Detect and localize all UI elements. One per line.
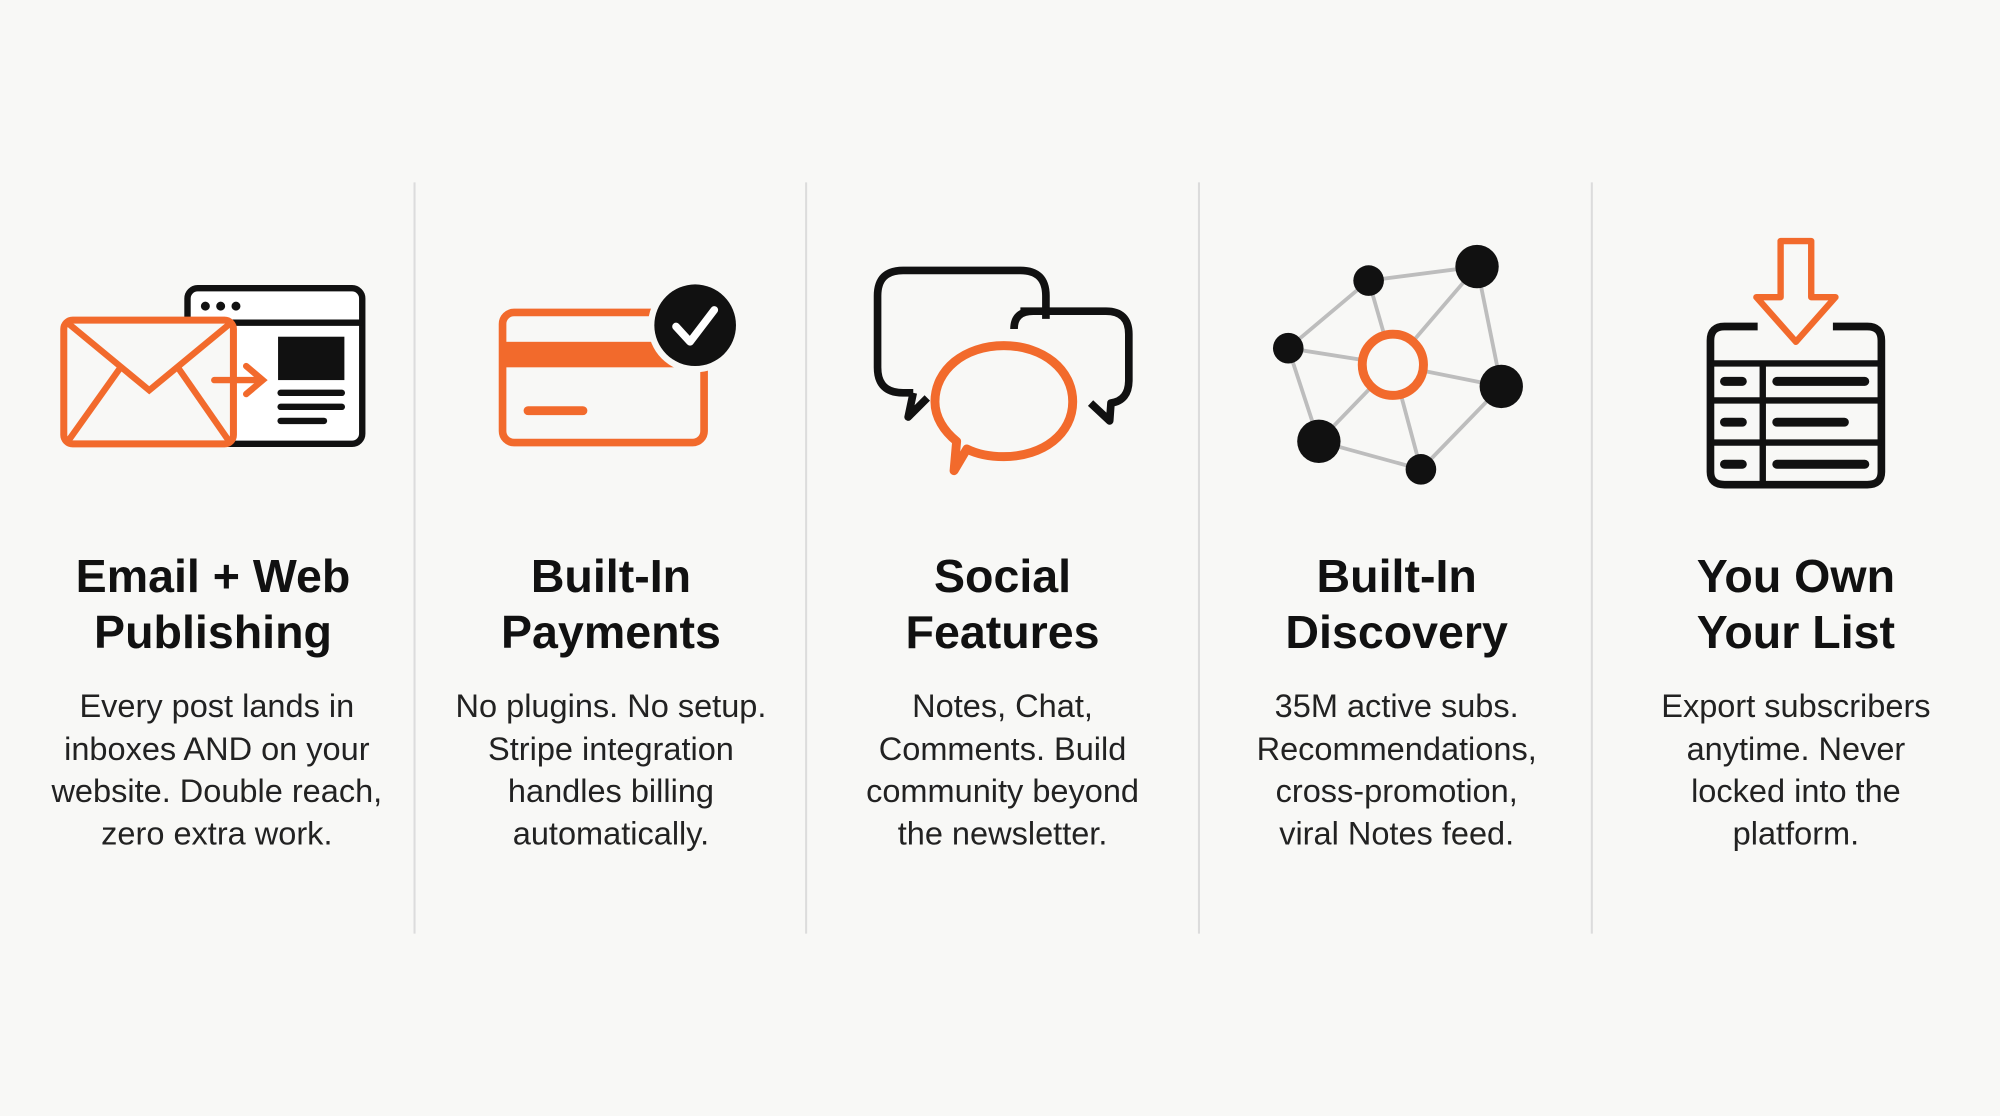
title: Discovery [1285,606,1508,658]
icon: table with download arrow [1710,241,1881,485]
panel: you own your list [1661,241,1931,851]
text block: Notes, Chat, [912,688,1093,724]
icon: card with check [503,278,742,443]
icon: network [1273,245,1523,485]
text block: No plugins. No setup. [456,688,766,724]
text block: the newsletter. [898,815,1107,851]
text block: Stripe integration [488,731,734,767]
text block: locked into the [1691,773,1901,809]
text block: Comments. Build [879,731,1126,767]
title: Publishing [94,606,332,658]
text block: Every post lands in [79,688,354,724]
title: Built-In [531,550,691,602]
text block: Recommendations, [1257,731,1537,767]
panel: built-in payments [456,278,766,851]
text block: Export subscribers [1661,688,1931,724]
text block: 35M active subs. [1275,688,1519,724]
text block: anytime. Never [1687,731,1905,767]
text block: community beyond [866,773,1139,809]
title: Payments [501,606,721,658]
panel: email + web publishing [50,288,382,851]
text block: cross-promotion, [1276,773,1518,809]
title: Your List [1697,606,1895,658]
icon: envelope and browser [64,288,362,444]
text block: automatically. [513,815,709,851]
text block: zero extra work. [101,815,332,851]
panel: built-in discovery [1257,245,1537,851]
text block: platform. [1733,815,1859,851]
text block: inboxes AND on your [64,731,370,767]
text block: website. Double reach, [50,773,382,809]
title: Features [906,606,1100,658]
title: Built-In [1317,550,1477,602]
text block: viral Notes feed. [1279,815,1514,851]
title: You Own [1697,550,1895,602]
title: Email + Web [76,550,350,602]
icon: chat bubbles [878,270,1129,471]
text block: handles billing [508,773,714,809]
title: Social [934,550,1071,602]
panel: social features [866,270,1139,851]
